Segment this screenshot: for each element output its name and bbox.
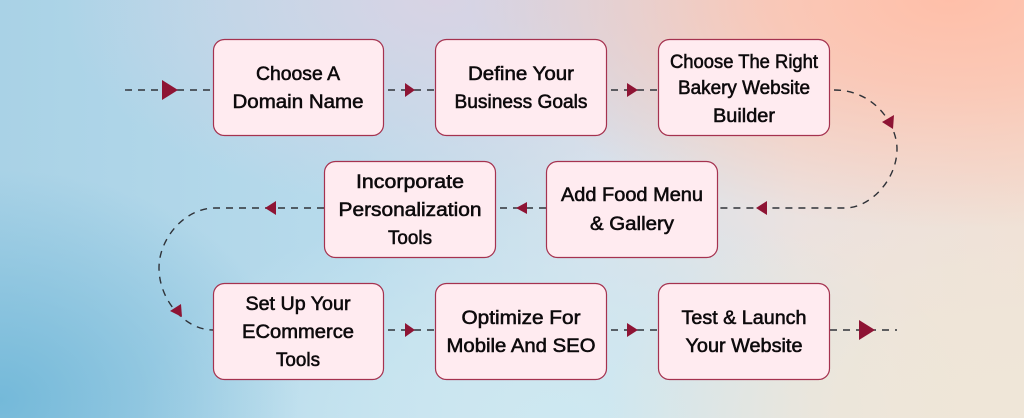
step 7: Optimize For Mobile And SEO [436, 284, 606, 380]
step 6: Set Up Your ECommerce Tools: Tools [276, 350, 320, 371]
connector: step 1 to step 2 [388, 83, 435, 97]
connector: step 8 to end [830, 320, 897, 340]
step 3: Choose The Right Bakery Website Builder: Bakery Website [678, 78, 810, 99]
step 5: Incorporate Personalization Tools: Incorporate [356, 172, 464, 193]
connector: step 6 to step 7 [388, 323, 435, 337]
step 6: Set Up Your ECommerce Tools [214, 284, 384, 380]
connector: step 2 to step 3 [611, 83, 658, 97]
step 2: Define Your Business Goals: Define Your [468, 64, 575, 85]
connector: step 4 to step 5 [496, 202, 546, 214]
connector: step 3 to step 4 curved [718, 90, 897, 215]
step 4: Add Food Menu & Gallery: Add Food Menu [561, 185, 703, 206]
step 5: Incorporate Personalization Tools [324, 162, 496, 258]
step 1: Choose A Domain Name: Domain Name [232, 92, 364, 113]
connector: start to step 1 [125, 80, 213, 100]
step 3: Choose The Right Bakery Website Builder: Builder [713, 106, 776, 127]
step 7: Optimize For Mobile And SEO: Mobile And SEO [446, 336, 596, 357]
step 3: Choose The Right Bakery Website Builder [658, 40, 830, 136]
step 6: Set Up Your ECommerce Tools: ECommerce [242, 322, 354, 343]
step 6: Set Up Your ECommerce Tools: Set Up Your [246, 294, 351, 315]
step 4: Add Food Menu & Gallery: & Gallery [590, 214, 675, 235]
step 8: Test & Launch Your Website: Test & Launch [682, 308, 806, 329]
step 3: Choose The Right Bakery Website Builder: Choose The Right [670, 52, 819, 73]
connector: step 5 to step 6 curved [159, 201, 324, 330]
connector: step 7 to step 8 [611, 323, 658, 337]
step 2: Define Your Business Goals [436, 40, 606, 136]
step 1: Choose A Domain Name [214, 40, 384, 136]
step 2: Define Your Business Goals: Business Goals [454, 92, 588, 113]
step 8: Test & Launch Your Website [658, 284, 830, 380]
step 4: Add Food Menu & Gallery [546, 162, 718, 258]
step 5: Incorporate Personalization Tools: Tools [388, 228, 432, 249]
step 7: Optimize For Mobile And SEO: Optimize For [462, 308, 581, 329]
step 1: Choose A Domain Name: Choose A [256, 64, 340, 85]
step 5: Incorporate Personalization Tools: Personalization [338, 200, 482, 221]
step 8: Test & Launch Your Website: Your Website [686, 336, 802, 357]
